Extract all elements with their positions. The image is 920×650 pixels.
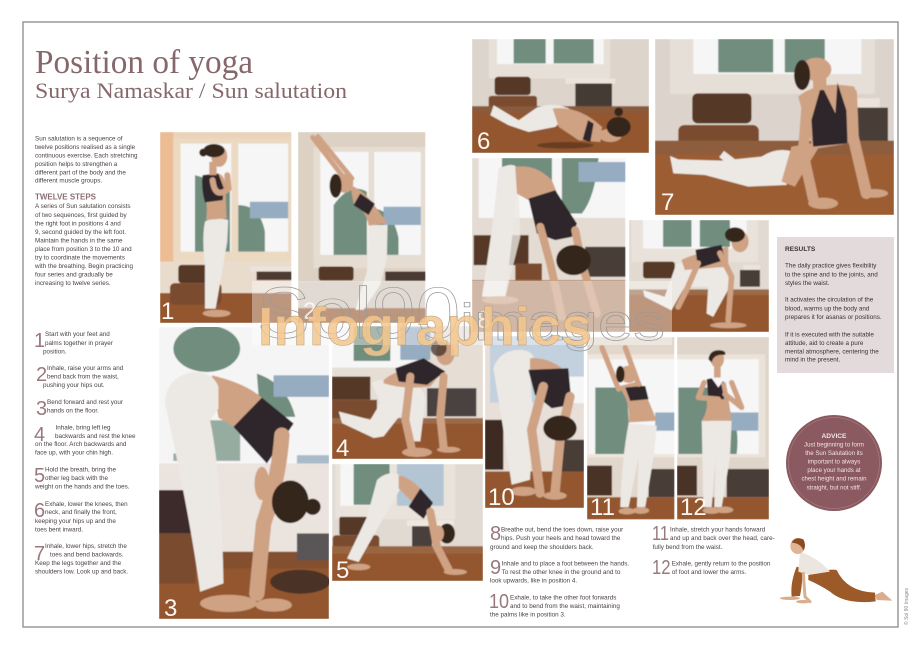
step 11 text: Inhale, stretch your hands forward: [670, 526, 766, 534]
photo 8: mountain pose: [472, 158, 626, 334]
advice text: the Sun Salutation its: [805, 450, 863, 457]
step 1 text: position.: [43, 348, 67, 356]
intro text block: different muscle groups.: [35, 178, 102, 185]
advice circle: [786, 415, 882, 511]
results text: It activates the circulation of the: [785, 297, 874, 304]
intro text block: different part of the body and the: [35, 169, 126, 176]
step 6 text: Exhale, lower the knees, then: [45, 501, 128, 508]
twelve steps text block: A series of Sun salutation consists: [35, 203, 131, 210]
intro text block: continuous exercise. Each stretching: [35, 153, 138, 160]
number 4: 4: [336, 435, 349, 462]
illustration: figure in lunge pose: [780, 538, 892, 604]
step 7 text: 7: [34, 543, 45, 565]
photo 3: standing forward bend: [159, 325, 330, 622]
number 2: 2: [303, 298, 316, 325]
step 1 text: [34, 330, 113, 356]
step 11 text: and up and back over the head, care-: [670, 535, 775, 542]
photo 4: low lunge: [332, 326, 483, 462]
step 4 text: on the floor. Arch backwards and: [35, 441, 127, 448]
number 7: 7: [661, 189, 674, 216]
photo 2: arms raised back bend: [298, 132, 426, 325]
step 2 text: pushing your hips out.: [43, 382, 105, 389]
number 1: 1: [161, 298, 174, 325]
photo 11: standing back bend: [587, 337, 674, 521]
step 9 text: Inhale and to place a foot between the hands.: [502, 560, 629, 568]
results text: mind in the present.: [785, 357, 841, 364]
results text: to the spine and to the joints, and: [785, 271, 878, 278]
twelve steps text block: Maintain the hands in the same: [35, 237, 123, 244]
credit: © Sol 90 Images: [903, 587, 910, 625]
advice text: straight, but not stiff.: [807, 484, 862, 491]
step 5 text: 5: [34, 465, 45, 487]
step 3 text: Bend forward and rest your: [47, 399, 123, 406]
number 10: 10: [488, 484, 515, 511]
step 9 text: To rest the other knee in the ground and to: [502, 569, 621, 576]
step 12 text: [652, 557, 771, 579]
step 4 text: 4: [34, 424, 45, 446]
step 5 text: other leg back with the: [45, 475, 109, 482]
step 10 text: [489, 591, 620, 618]
step 8 text: [490, 523, 623, 551]
step 6 text: toes bent inward.: [35, 526, 83, 534]
twelve steps text block: four series and gradually be: [35, 271, 113, 278]
step 9 text: look upwards, like in position 4.: [490, 578, 577, 584]
twelve steps text block: try to coordinate the movements: [35, 254, 125, 261]
step 1 text: Start with your feet and: [45, 331, 110, 338]
twelve steps text block: place from position 3 to the 10 and: [35, 246, 132, 253]
twelve steps text block: the right foot in positions 4 and: [35, 221, 121, 228]
step 12 text: of foot and lower the arms.: [672, 569, 747, 576]
steps 8 to 12 instructions: [489, 523, 775, 618]
step 3 text: [36, 398, 123, 420]
step 11 text: [652, 523, 775, 551]
advice heading: ADVICE: [822, 433, 847, 440]
advice text: place your hands at: [807, 467, 861, 474]
twelve steps text block: 9, second guided by the left foot.: [35, 229, 126, 236]
subtitle: Surya Namaskar / Sun salutation: [35, 78, 347, 103]
step 2 text: bend back from the waist,: [47, 374, 119, 380]
step 5 text: weight on the hands and the toes.: [34, 484, 130, 490]
step 8 text: hips. Push your heels and head toward the: [501, 535, 621, 542]
results text: prepares it for asanas or positions.: [785, 314, 882, 321]
step 4 text: Inhale, bring left leg: [56, 424, 111, 432]
step 8 text: 8: [490, 523, 501, 545]
step 4 text: backwards and rest the knee: [55, 433, 136, 440]
results text: The daily practice gives flexibility: [785, 263, 877, 270]
step 2 text: 2: [36, 364, 47, 386]
results text: styles the waist.: [785, 280, 830, 287]
results text: attitude, aid to create a pure: [785, 340, 864, 347]
step 3 text: hands on the floor.: [47, 408, 99, 414]
step 5 text: Hold the breath, bring the: [45, 466, 117, 474]
number 3: 3: [164, 595, 177, 622]
results heading: RESULTS: [785, 246, 816, 253]
heading: twelve steps: TWELVE STEPS: [35, 193, 97, 202]
watermark: Sol90: [257, 274, 460, 354]
number 5: 5: [336, 557, 349, 584]
twelve steps text block: of two sequences, first guided by: [35, 212, 128, 219]
step 6 text: [34, 500, 128, 534]
intro text block: twelve positions realised as a single: [35, 144, 136, 151]
twelve steps text block: [34, 203, 134, 287]
step 12 text: Exhale, gently return to the position: [672, 560, 771, 568]
photo 6: eight point pose: [472, 39, 649, 155]
step 9 text: [490, 557, 629, 584]
photos group: [159, 39, 894, 622]
results text: If it is executed with the suitable: [785, 331, 874, 338]
watermark: Infographics: [258, 297, 592, 357]
step 10 text: 10: [489, 591, 509, 613]
step 5 text: [34, 465, 130, 490]
step 8 text: Breathe out, bend the toes down, raise your: [501, 526, 623, 534]
advice text: important to always: [808, 458, 860, 465]
step 2 text: Inhale, raise your arms and: [47, 365, 124, 372]
step 7 text: [34, 543, 128, 576]
results text: blood, warms up the body and: [785, 305, 870, 312]
watermark: images: [460, 294, 665, 352]
step 9 text: 9: [490, 557, 501, 579]
step 2 text: [36, 364, 124, 389]
step 10 text: the palms like in position 3.: [490, 612, 566, 618]
title: Position of yoga: [35, 44, 253, 81]
step 11 text: fully bend from the waist.: [653, 544, 723, 551]
advice text: chest height and remain: [801, 476, 867, 483]
step 4 text: [34, 424, 136, 456]
step 3 text: 3: [36, 398, 47, 420]
advice text: [801, 442, 867, 491]
step 7 text: Inhale, lower hips, stretch the: [45, 543, 127, 550]
number 6: 6: [477, 128, 490, 155]
watermark: [252, 274, 672, 357]
number 12: 12: [680, 494, 707, 521]
twelve steps text block: with the breathing. Begin practicing: [34, 263, 134, 270]
photo 12: return to prayer pose: [677, 337, 769, 521]
step 12 text: 12: [652, 557, 670, 579]
step 1 text: 1: [34, 330, 45, 352]
advice text: Just beginning to form: [804, 442, 864, 449]
intro text block: position helps to strengthen a: [35, 161, 118, 168]
photo 10: forward bend with straight legs: [485, 336, 584, 511]
intro text block: Sun salutation is a sequence of: [35, 135, 123, 142]
step 10 text: Exhale, to take the other foot forwards: [510, 594, 616, 602]
step 10 text: and to bend from the waist, maintaining: [510, 603, 620, 610]
step 4 text: face up, with your chin high.: [35, 450, 113, 456]
results text: [785, 263, 882, 364]
intro text block: [35, 135, 138, 185]
step 6 text: 6: [34, 500, 45, 522]
step 7 text: Keep the legs together and the: [35, 560, 122, 567]
number 8: 8: [477, 307, 490, 334]
steps 1 to 7 instructions: [34, 330, 136, 576]
photo 5: downward facing pose: [332, 464, 483, 584]
step 11 text: 11: [652, 523, 669, 545]
results text: mental atmosphere, centering the: [785, 348, 879, 355]
step 6 text: keeping your hips up and the: [35, 518, 116, 525]
twelve steps text block: increasing to twelve series.: [35, 280, 111, 287]
number 11: 11: [590, 494, 615, 521]
title: [35, 44, 347, 103]
step 6 text: neck, and finally the front,: [45, 509, 117, 516]
photo 7: cobra pose: [655, 39, 894, 216]
photo 9: lunge looking up: [629, 220, 769, 332]
results panel: [777, 237, 894, 373]
step 1 text: palms together in prayer: [45, 340, 113, 347]
photo 1: standing prayer pose: [160, 132, 292, 325]
step 7 text: toes and bend backwards.: [50, 552, 124, 558]
step 7 text: shoulders low. Look up and back.: [35, 569, 128, 576]
step 8 text: ground and keep the shoulders back.: [490, 544, 594, 551]
